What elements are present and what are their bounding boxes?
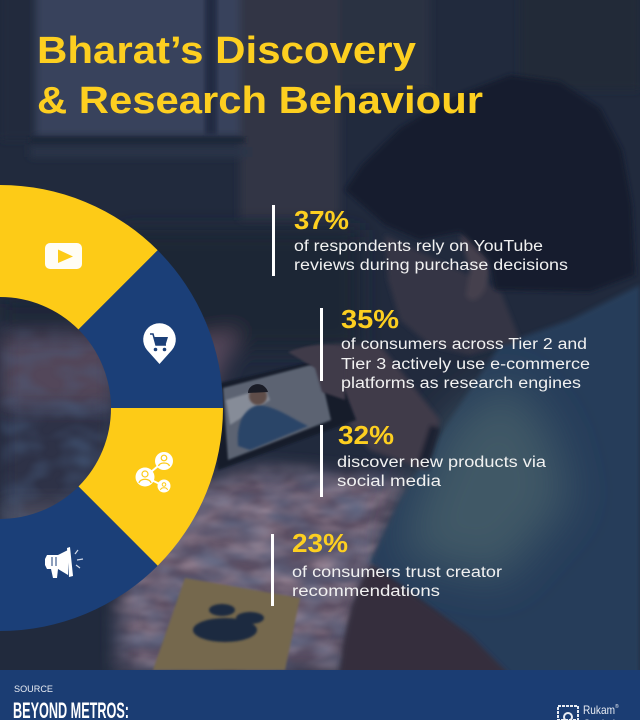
stat: 23% creator recommendations: recommendations <box>292 583 440 600</box>
title: & Research Behaviour <box>37 80 483 122</box>
stat: 23% creator recommendations: 23% <box>292 528 348 558</box>
stat: 37% YouTube reviews <box>272 205 568 276</box>
logo: Rukam Capital: Rukam <box>583 703 615 717</box>
stat: 32% social media: 32% <box>338 420 394 450</box>
stat: 35% e-commerce research: Tier 3 actively use e-commerce <box>341 356 590 373</box>
box with earbuds <box>153 578 300 670</box>
segment: e-commerce (blue) <box>78 250 223 408</box>
icon: shopping cart pin <box>143 323 176 364</box>
stat: 32% social media: social media <box>337 473 441 490</box>
phone <box>216 357 356 470</box>
stat: 35% e-commerce research: of consumers across Tier 2 and <box>341 336 587 353</box>
stat: 37% YouTube reviews: 37% <box>294 205 349 235</box>
hair <box>345 75 635 292</box>
segment: YouTube (yellow) <box>0 185 158 330</box>
stat: 32% social media: discover new products via <box>337 454 546 471</box>
title <box>37 30 483 122</box>
stat: 23% creator recommendations <box>271 528 502 606</box>
logo: Rukam Capital: ® <box>615 703 619 710</box>
stat: 23% creator recommendations: of consumers trust creator <box>292 564 502 581</box>
title: Bharat’s Discovery <box>37 30 416 72</box>
stat: 35% e-commerce research: 35% <box>341 304 399 334</box>
segment: social media (yellow) <box>78 408 223 566</box>
shirt <box>370 285 640 675</box>
footer band <box>0 670 640 720</box>
icon: YouTube play <box>45 243 82 269</box>
stat: 35% e-commerce research: platforms as research engines <box>341 375 581 392</box>
stat: 35% e-commerce research <box>320 304 590 392</box>
logo: Rukam Capital <box>558 703 619 720</box>
donut chart <box>0 185 223 631</box>
face and ear <box>385 234 520 355</box>
icon: social network people <box>136 452 173 492</box>
arm and hand <box>300 344 510 675</box>
stat: 37% YouTube reviews: reviews during purchase decisions <box>294 257 568 274</box>
source label: SOURCE <box>14 684 53 694</box>
stat: 37% YouTube reviews: of respondents rely on YouTube <box>294 238 543 255</box>
segment: creators (blue) <box>0 486 158 631</box>
icon: megaphone <box>45 547 83 578</box>
stat: 32% social media <box>320 420 546 497</box>
